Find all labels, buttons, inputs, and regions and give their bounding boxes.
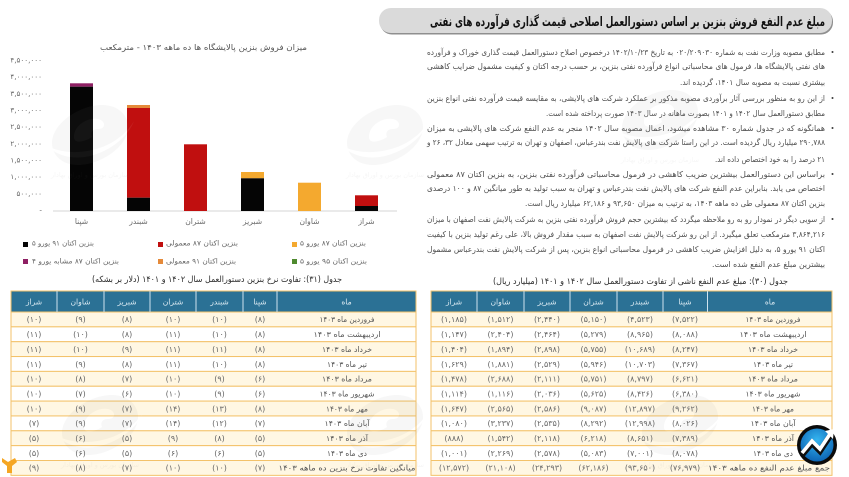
table rows: (۱,۱۱۴) xyxy=(441,390,467,398)
table rows: (۶,۶۲۱) xyxy=(672,375,698,384)
y axis labels: ۱,۵۰۰,۰۰۰ xyxy=(10,156,42,164)
table rows: (۱۰) xyxy=(73,345,88,354)
table rows: (۸) xyxy=(122,330,132,339)
table header: شتران xyxy=(163,298,183,306)
bar: شتران xyxy=(184,144,207,211)
table rows: (۷,۰۰۱) xyxy=(627,449,653,458)
table rows: (۸) xyxy=(75,464,86,473)
table rows: (۵) xyxy=(29,434,39,443)
table rows: (۱,۶۴۷) xyxy=(441,404,467,413)
bullet lines xyxy=(426,47,826,269)
table rows: خرداد ماه ۱۴۰۳ xyxy=(322,345,372,354)
table rows: (۱۰,۶۸۹) xyxy=(625,345,655,354)
table rows: (۶) xyxy=(168,449,178,458)
table rows: (۷) xyxy=(122,419,132,428)
table rows: (۱۲) xyxy=(212,419,227,428)
table rows: (۸۸۸) xyxy=(444,434,464,443)
table rows: (۱۲,۸۹۷) xyxy=(625,404,655,413)
table rows: (۲,۵۳۵) xyxy=(534,419,560,428)
table rows: (۱۰) xyxy=(212,315,227,324)
table header: ماه xyxy=(341,298,352,306)
table rows: (۶,۳۸۰) xyxy=(672,390,698,398)
bullet lines: اکتان ۹۱ یورو ۵، به دلیل افزایش ضریب کاهشی در فرمول محاسباتی انواع بنزین، پس از شرکت پالایش نفت بندرعباس مشمول xyxy=(427,245,825,254)
table header: ماه xyxy=(765,298,775,306)
y axis labels: ۲,۰۰۰,۰۰۰ xyxy=(10,139,42,148)
table rows: (۱,۱۸۵) xyxy=(441,315,467,324)
table rows: مرداد ماه ۱۴۰۳ xyxy=(748,375,798,384)
table rows: (۶) xyxy=(75,434,86,443)
table rows: (۱۰) xyxy=(166,390,180,398)
table rows: (۷) xyxy=(255,419,265,428)
table rows: (۵) xyxy=(255,434,265,443)
x axis labels: شبریز xyxy=(242,217,262,226)
bullet markers xyxy=(832,51,834,220)
table rows: (۳,۲۳۷) xyxy=(488,419,513,428)
table rows: (۶) xyxy=(75,449,86,458)
table rows: (۱۱) xyxy=(166,360,180,369)
table header: شراز xyxy=(445,298,462,306)
table rows: تیر ماه ۱۴۰۳ xyxy=(753,360,793,369)
bar: شبندر xyxy=(127,105,150,211)
table rows: (۸,۷۹۷) xyxy=(627,375,653,384)
table rows: جمع مبلغ عدم النفع ده ماهه ۱۴۰۳ xyxy=(708,464,830,473)
table rows: (۲۱,۱۰۸) xyxy=(485,464,516,473)
table 30: lost revenue by refinery xyxy=(431,291,832,475)
table header: شپنا xyxy=(678,298,692,306)
table rows: (۵,۲۷۹) xyxy=(581,330,606,339)
table rows: دی ماه ۱۴۰۳ xyxy=(327,449,367,458)
table rows: فروردین ماه ۱۴۰۳ xyxy=(746,315,801,324)
table rows: (۱,۴۰۴) xyxy=(441,345,467,354)
table rows: اردیبهشت ماه ۱۴۰۳ xyxy=(314,330,380,339)
table rows xyxy=(439,315,830,473)
table header: شبریز xyxy=(116,298,137,306)
table rows: (۱۱) xyxy=(166,330,180,339)
table rows: (۵) xyxy=(122,434,132,443)
table rows: (۶,۲۱۸) xyxy=(581,434,606,443)
table rows: (۱,۰۰۱) xyxy=(441,449,467,458)
table rows: (۱۳) xyxy=(212,404,227,413)
bullet lines: از این رو به منظور بررسی آثار برآوردی مصوبه مذکور بر عملکرد شرکت های پالایشی، به مقایسه قیمت فرآورده نفتی انواع بنزین xyxy=(427,93,825,103)
table rows: (۲,۴۰۴) xyxy=(488,330,513,339)
table rows: (۵) xyxy=(29,449,39,458)
table header: شتران xyxy=(583,298,604,306)
table rows: (۸,۶۵۱) xyxy=(627,434,653,443)
table rows: شهریور ماه ۱۴۰۳ xyxy=(320,390,374,398)
table rows: (۲,۵۲۹) xyxy=(534,360,560,369)
y axis labels: - xyxy=(39,206,42,214)
table rows: (۹) xyxy=(168,434,178,443)
table header xyxy=(11,291,416,312)
bullet lines: براساس این دستورالعمل بیشترین ضریب کاهشی در فرمول محاسباتی فرآورده نفتی بنزین، به بنزین اکتان ۸۷ معمولی xyxy=(427,169,825,179)
table rows: مهر ماه ۱۴۰۳ xyxy=(326,404,368,413)
table rows: (۹) xyxy=(29,464,39,473)
table rows: (۱۱) xyxy=(27,330,41,339)
table rows: (۱۰) xyxy=(27,404,41,413)
table rows: (۲,۵۶۵) xyxy=(488,404,513,413)
table rows: (۱۱) xyxy=(212,345,227,354)
bar: شراز xyxy=(355,195,378,211)
table rows: (۱۰) xyxy=(166,464,180,473)
table rows: تیر ماه ۱۴۰۳ xyxy=(327,360,367,369)
table rows: (۶) xyxy=(214,449,225,458)
table rows: (۸,۲۴۷) xyxy=(672,345,698,354)
stacked bar chart: gasoline sales by refinery xyxy=(10,42,397,266)
bullet lines: ۲۹۰,۷۸۸ میلیارد ریال گردیده است. در این راستا شرکت های پالایش نفت بندرعباس، اصفهان و تهران به ترتیب سهمی معادل ۳۲، ۲۶ و xyxy=(426,137,826,147)
table rows: (۸,۰۷۸) xyxy=(672,449,698,458)
icon: blue circular logo with rising arrow xyxy=(797,425,837,465)
table rows: (۱۰) xyxy=(212,360,227,369)
table rows: آذر ماه ۱۴۰۳ xyxy=(752,433,795,443)
table rows: (۱,۶۲۹) xyxy=(441,360,467,369)
table rows: (۷۶,۹۷۹) xyxy=(670,464,700,473)
table rows: (۱۱) xyxy=(27,345,41,354)
table rows: (۸) xyxy=(255,404,265,413)
table rows: (۶) xyxy=(122,390,132,398)
table rows: (۷) xyxy=(122,375,132,384)
table rows: (۷) xyxy=(122,464,132,473)
table rows: (۴,۵۲۳) xyxy=(627,315,653,324)
x axis labels: شتران xyxy=(185,217,206,226)
table rows: (۸,۹۶۵) xyxy=(627,330,653,339)
bullet lines: ۲۱ درصد را به خود اختصاص داده اند. xyxy=(715,155,825,164)
table rows: مهر ماه ۱۴۰۳ xyxy=(752,404,794,413)
table rows: (۱۴) xyxy=(166,404,180,413)
table rows: (۷) xyxy=(75,390,86,398)
y axis labels: ۴,۵۰۰,۰۰۰ xyxy=(10,56,42,64)
y axis labels: ۳,۰۰۰,۰۰۰ xyxy=(10,106,42,114)
table rows: (۱۰) xyxy=(212,464,227,473)
bar: شاوان xyxy=(298,183,321,211)
table rows: (۹) xyxy=(214,375,225,384)
table header: شاوان xyxy=(70,298,91,306)
table rows: (۷,۵۲۲) xyxy=(672,315,698,324)
table rows: (۸,۴۲۶) xyxy=(627,390,653,398)
table rows: (۲,۵۸۶) xyxy=(534,404,560,413)
table rows: آبان ماه ۱۴۰۳ xyxy=(750,418,796,428)
x axis labels: شراز xyxy=(357,217,375,226)
table rows: (۷,۳۸۹) xyxy=(672,434,698,443)
table rows: (۵) xyxy=(122,449,132,458)
table rows: (۱۰) xyxy=(27,315,41,324)
table rows xyxy=(27,315,416,473)
title banner xyxy=(379,8,833,34)
table rows: (۱۱) xyxy=(27,360,41,369)
table rows: (۲۴,۲۹۳) xyxy=(532,464,562,473)
table rows: (۶۲,۱۸۶) xyxy=(578,464,609,473)
table rows: (۱۱) xyxy=(166,345,180,354)
table rows: (۷) xyxy=(255,464,265,473)
y axis labels xyxy=(10,56,42,214)
table rows: مرداد ماه ۱۴۰۳ xyxy=(322,375,372,384)
table caption: table 30: جدول (۳۰): مبلغ عدم النفع ناشی از تفاوت دستورالعمل سال ۱۴۰۲ و ۱۴۰۱ (میلیارد ریال) xyxy=(493,277,788,287)
table rows: (۵,۰۸۳) xyxy=(581,449,606,458)
table rows: (۱,۵۱۲) xyxy=(488,315,513,324)
table rows: (۹) xyxy=(122,345,132,354)
table rows: (۲,۴۴۰) xyxy=(534,315,560,324)
x axis labels: شبندر xyxy=(128,217,148,226)
table rows: (۱۰) xyxy=(212,330,227,339)
legend xyxy=(23,240,367,266)
bullet lines: های نفتی پالایشگاه ها، فرمول های محاسباتی انواع فرآورده نفتی بنزین، بر حسب درجه اکتان و کیفیت مشمول ضرایب کاهشی xyxy=(427,61,825,71)
table header xyxy=(431,291,832,312)
table rows: (۸) xyxy=(122,315,132,324)
table rows: (۲,۶۸۸) xyxy=(488,375,513,384)
table rows: (۹) xyxy=(75,404,86,413)
table rows: (۷) xyxy=(29,419,39,428)
table rows: (۱۰,۷۰۳) xyxy=(625,360,655,369)
table rows: (۱۰) xyxy=(27,390,41,398)
table rows: (۵,۹۴۶) xyxy=(581,360,606,369)
table rows: (۶) xyxy=(255,390,265,398)
table header: شبندر xyxy=(209,298,229,306)
table rows: (۶) xyxy=(255,375,265,384)
table rows: (۸) xyxy=(122,360,132,369)
bullet lines: مطابق دستورالعمل سال ۱۴۰۲ و ۱۴۰۱ بصورت ماهانه در سال ۱۴۰۳ صورت پرداخته شده است. xyxy=(546,109,825,118)
table header: شپنا xyxy=(253,298,267,306)
x axis labels xyxy=(75,217,375,226)
chart title: میزان فروش بنزین پالایشگاه ها ده ماهه ۱۴۰۳ - مترمکعب xyxy=(100,42,307,52)
legend: بنزین اکتان ۹۱ یورو ۵ xyxy=(32,240,94,248)
table rows: (۷,۳۶۷) xyxy=(672,360,698,369)
table rows: (۸) xyxy=(75,375,86,384)
table rows: (۵,۱۵۰) xyxy=(581,315,606,324)
table 31: gasoline price difference xyxy=(11,291,416,475)
table rows: (۵) xyxy=(255,449,265,458)
y axis labels: ۳,۵۰۰,۰۰۰ xyxy=(10,89,42,98)
x axis labels: شپنا xyxy=(75,217,88,226)
bullet lines: بیشتری نسبت به مصوبه سال ۱۴۰۱، گردیده اند. xyxy=(680,77,825,87)
table rows: (۹) xyxy=(75,315,86,324)
legend: بنزین اکتان ۸۷ معمولی xyxy=(166,240,238,248)
table header: شبریز xyxy=(536,298,557,306)
table rows: (۱,۸۹۴) xyxy=(488,345,513,354)
y axis labels: ۲,۵۰۰,۰۰۰ xyxy=(10,122,42,131)
table rows: (۹) xyxy=(75,419,86,428)
table rows: میانگین تفاوت نرخ بنزین ده ماهه ۱۴۰۳ xyxy=(278,464,416,473)
table rows: (۲,۲۶۹) xyxy=(488,449,513,458)
table rows: (۸,۰۸۸) xyxy=(672,330,698,339)
table rows: (۱۲,۵۷۲) xyxy=(439,464,469,473)
table rows: (۲,۵۷۸) xyxy=(534,449,560,458)
table rows: (۱۴) xyxy=(166,419,180,428)
bullet lines: اختصاص می یابد. بنابراین عدم النفع شرکت های پالایش نفت بندرعباس و تهران به سبب تولید به طور میانگین ۸۷ و ۱۰۰ درصدی xyxy=(427,183,825,193)
y axis labels: ۵۰۰,۰۰۰ xyxy=(17,189,42,198)
table rows: (۲,۱۱۱) xyxy=(534,375,560,384)
table header: شراز xyxy=(25,298,42,306)
table rows: (۷) xyxy=(122,404,132,413)
table rows: (۲,۱۱۸) xyxy=(534,434,560,443)
table rows: فروردین ماه ۱۴۰۳ xyxy=(320,315,375,324)
table rows: (۸) xyxy=(214,434,225,443)
bar: شبریز xyxy=(241,172,264,211)
row backgrounds xyxy=(431,312,832,475)
legend: بنزین اکتان ۹۱ معمولی xyxy=(166,258,236,266)
table rows: (۲,۴۶۴) xyxy=(534,330,560,339)
table rows: خرداد ماه ۱۴۰۳ xyxy=(748,345,798,354)
table rows: (۸,۲۹۲) xyxy=(581,419,606,428)
table header: شبندر xyxy=(630,298,649,306)
table rows: (۱۲,۹۹۸) xyxy=(625,419,655,428)
bullet lines: همانگونه که در جدول شماره ۳۰ مشاهده میشود، اعمال مصوبه سال ۱۴۰۲ منجر به عدم النفع شرکت های پالایشی به میزان xyxy=(427,123,825,133)
table rows: (۱,۸۸۱) xyxy=(488,360,513,369)
bullet lines: ۳,۸۶۴,۲۱۶ مترمکعب تعلق میگیرد. از این رو شرکت پالایش نفت اصفهان به سبب مقدار فروش بالا، علی رغم تولید بنزین با کیفیت xyxy=(427,229,825,239)
table rows: (۹) xyxy=(75,360,86,369)
table rows: (۲,۰۳۶) xyxy=(534,390,560,398)
table rows: (۹,۰۸۷) xyxy=(581,404,606,413)
table rows: (۱,۴۷۸) xyxy=(441,375,467,384)
legend: بنزین اکتان ۸۷ مشابه یورو ۴ xyxy=(32,258,119,266)
table rows: (۲,۸۹۸) xyxy=(534,345,560,354)
table rows: (۸,۰۲۶) xyxy=(672,419,698,428)
table rows: (۵,۷۵۵) xyxy=(581,345,606,354)
table rows: آبان ماه ۱۴۰۳ xyxy=(324,418,370,428)
table rows: (۹,۲۶۲) xyxy=(672,404,698,413)
table caption: table 31: جدول (۳۱): تفاوت نرخ بنزین دستورالعمل سال ۱۴۰۲ و ۱۴۰۱ (دلار بر بشکه) xyxy=(92,275,342,285)
table rows: (۸) xyxy=(255,360,265,369)
table rows: اردیبهشت ماه ۱۴۰۳ xyxy=(740,330,806,339)
text block: analysis bullets xyxy=(426,47,834,269)
table rows: (۱۰) xyxy=(166,375,180,384)
y axis labels: ۱,۰۰۰,۰۰۰ xyxy=(10,172,42,181)
table rows: (۹۳,۶۵۰) xyxy=(625,464,655,473)
table rows: (۵,۷۵۱) xyxy=(581,375,606,384)
y axis labels: ۴,۰۰۰,۰۰۰ xyxy=(10,72,42,81)
table rows: (۱,۱۴۷) xyxy=(441,330,467,339)
legend: بنزین اکتان ۹۵ یورو ۵ xyxy=(300,258,367,266)
table rows: (۹) xyxy=(214,390,225,398)
table rows: دی ماه ۱۴۰۳ xyxy=(753,449,793,458)
legend: بنزین اکتان ۸۷ یورو ۵ xyxy=(300,240,366,248)
table rows: آذر ماه ۱۴۰۳ xyxy=(326,433,369,443)
bullet lines: مطابق مصوبه وزارت نفت به شماره ۰۲۰/۲۰۹۰۳۰ به تاریخ ۱۴۰۲/۱۰/۲۳ درخصوص اصلاح دستورالعمل قیمت گذاری خوراک و فرآورده xyxy=(427,47,825,57)
row backgrounds xyxy=(11,312,416,475)
bar: شپنا xyxy=(70,83,93,211)
table rows: (۱,۰۸۰) xyxy=(441,419,467,428)
icon: orange corner mark xyxy=(2,458,17,473)
table rows: (۱۰) xyxy=(27,375,41,384)
table rows: (۸) xyxy=(255,330,265,339)
table rows: (۱۰) xyxy=(166,315,180,324)
bullet lines: بنزین اکتان ۸۷ معمولی طی ده ماهه ۱۴۰۳، به ترتیب به میزان ۹۳,۶۵۰ و ۶۲,۱۸۶ میلیارد ریال است. xyxy=(525,199,825,208)
table rows: شهریور ماه ۱۴۰۳ xyxy=(746,390,800,398)
table header: شاوان xyxy=(490,298,511,306)
table rows: (۸) xyxy=(255,345,265,354)
table rows: (۱,۵۴۲) xyxy=(488,434,513,443)
table rows: (۸) xyxy=(255,315,265,324)
x axis labels: شاوان xyxy=(299,217,320,226)
table rows: (۵,۶۲۵) xyxy=(581,390,606,398)
table rows: (۱,۱۱۶) xyxy=(488,390,513,398)
bullet lines: بیشترین مبلغ عدم النفع شده است. xyxy=(712,260,825,269)
table rows: (۱۰) xyxy=(73,330,88,339)
